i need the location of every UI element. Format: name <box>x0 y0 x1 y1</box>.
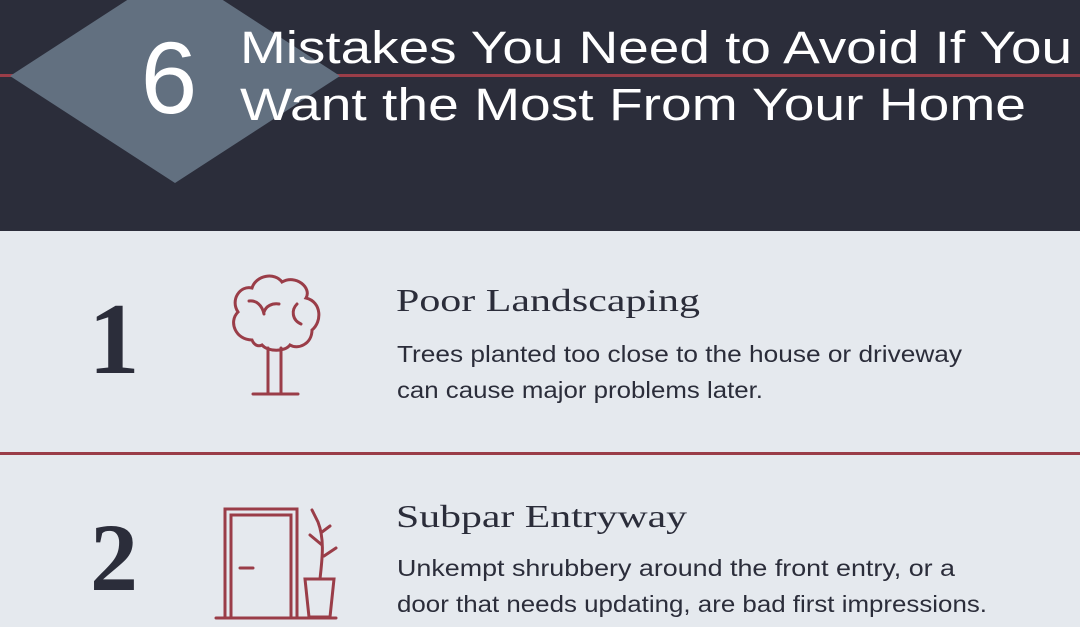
header diamond <box>10 0 340 183</box>
number 1: 1 <box>88 283 140 396</box>
body text 2 <box>397 555 987 617</box>
title <box>240 22 1072 130</box>
title: Mistakes You Need to Avoid If You <box>240 22 1072 73</box>
body text 1: can cause major problems later. <box>397 377 763 403</box>
icon: door with plant <box>216 509 336 618</box>
panel: mistake 2 <box>90 498 987 618</box>
heading: Subpar Entryway: Subpar Entryway <box>396 498 687 534</box>
panel: mistake 1 <box>88 276 963 403</box>
big number 6: 6 <box>141 21 197 135</box>
body text 1: Trees planted too close to the house or driveway <box>397 341 963 367</box>
body text 2: door that needs updating, are bad first impressions. <box>397 591 987 617</box>
icon: tree <box>234 276 319 394</box>
body text 1 <box>397 341 963 403</box>
number 2: 2 <box>90 504 138 611</box>
title: Want the Most From Your Home <box>240 79 1026 130</box>
heading: Poor Landscaping: Poor Landscaping <box>396 282 700 318</box>
header panel <box>0 0 1080 231</box>
body text 2: Unkempt shrubbery around the front entry, or a <box>397 555 955 581</box>
